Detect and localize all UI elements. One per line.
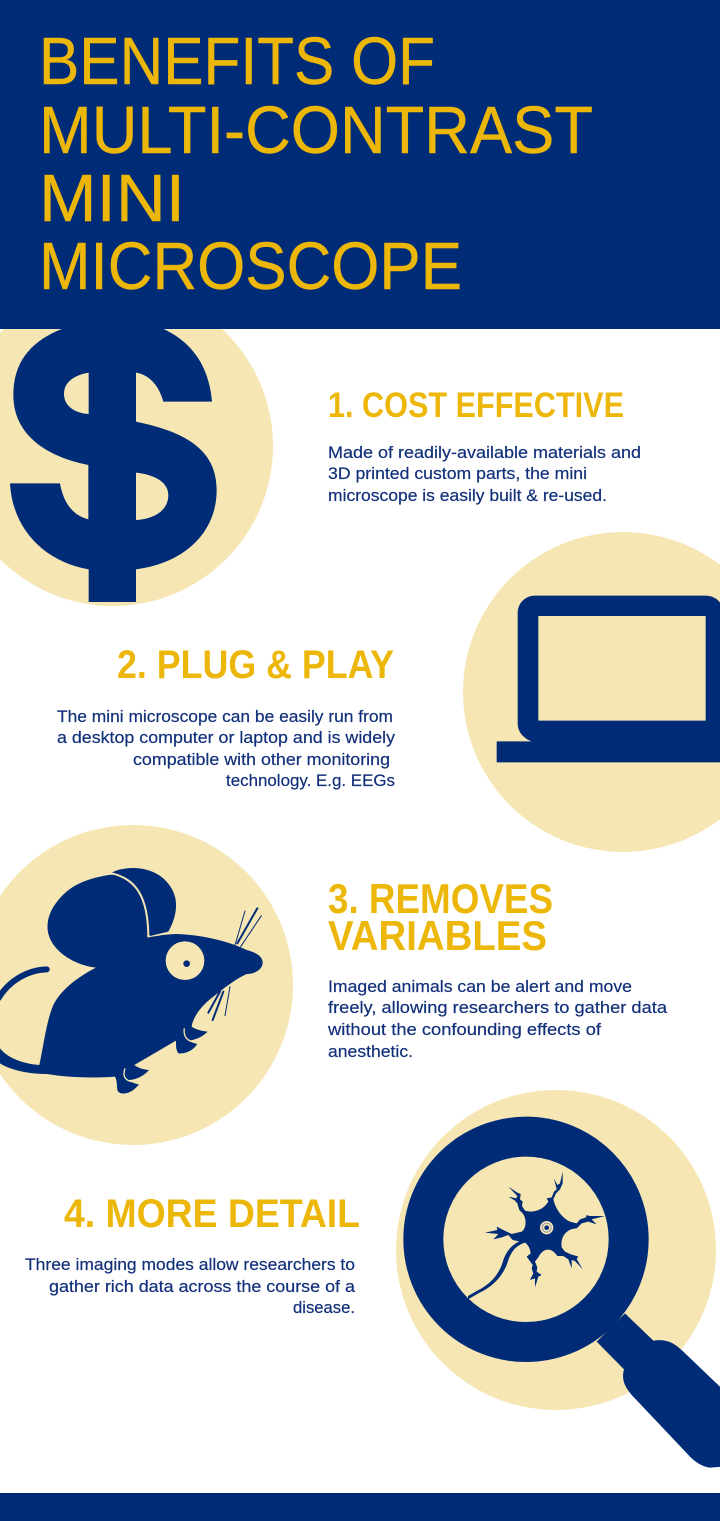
title: MICROSCOPE [39,229,462,304]
heading: cost effective: 1. COST EFFECTIVE [328,386,624,425]
text: removes variables: freely, allowing researchers to gather data [328,998,668,1017]
text: plug and play: technology. E.g. EEGs [226,771,395,790]
heading: plug and play: 2. PLUG & PLAY [117,643,394,687]
text: cost effective [328,443,641,505]
title: MINI [39,161,185,236]
footer band [0,1493,720,1521]
text: cost effective: Made of readily-available materials and [328,443,641,462]
text: cost effective: 3D printed custom parts, the mini [328,464,587,483]
text: plug and play: compatible with other monitoring [133,750,390,769]
title: BENEFITS OF [39,24,435,99]
text: removes variables: without the confounding effects of [327,1020,601,1039]
icon: dollar sign on cream circle [0,286,273,606]
heading: more detail: 4. MORE DETAIL [64,1192,360,1236]
text: more detail: disease. [293,1298,355,1317]
heading: removes variables: VARIABLES [328,912,547,959]
text: cost effective: microscope is easily built & re-used. [328,486,607,505]
text: plug and play: The mini microscope can be easily run from [57,707,393,726]
text: removes variables [327,977,668,1061]
icon: mouse on cream circle [0,825,293,1145]
icon: neuron [468,1172,605,1299]
text: removes variables: anesthetic. [328,1042,413,1061]
text: more detail: Three imaging modes allow researchers to [25,1255,355,1274]
heading: removes variables: 3. REMOVES [328,875,553,922]
heading: removes variables [328,875,553,959]
text: more detail [25,1255,356,1317]
text: removes variables: Imaged animals can be alert and move [328,977,632,996]
text: plug and play [57,707,396,790]
icon: magnifying glass over neuron on cream circle [396,1090,720,1468]
icon: laptop on cream circle [463,532,720,852]
title: MULTI-CONTRAST [39,93,593,168]
text: more detail: gather rich data across the course of a [49,1277,356,1296]
header band [0,0,720,329]
title [39,24,593,304]
text: plug and play: a desktop computer or laptop and is widely [57,728,396,747]
